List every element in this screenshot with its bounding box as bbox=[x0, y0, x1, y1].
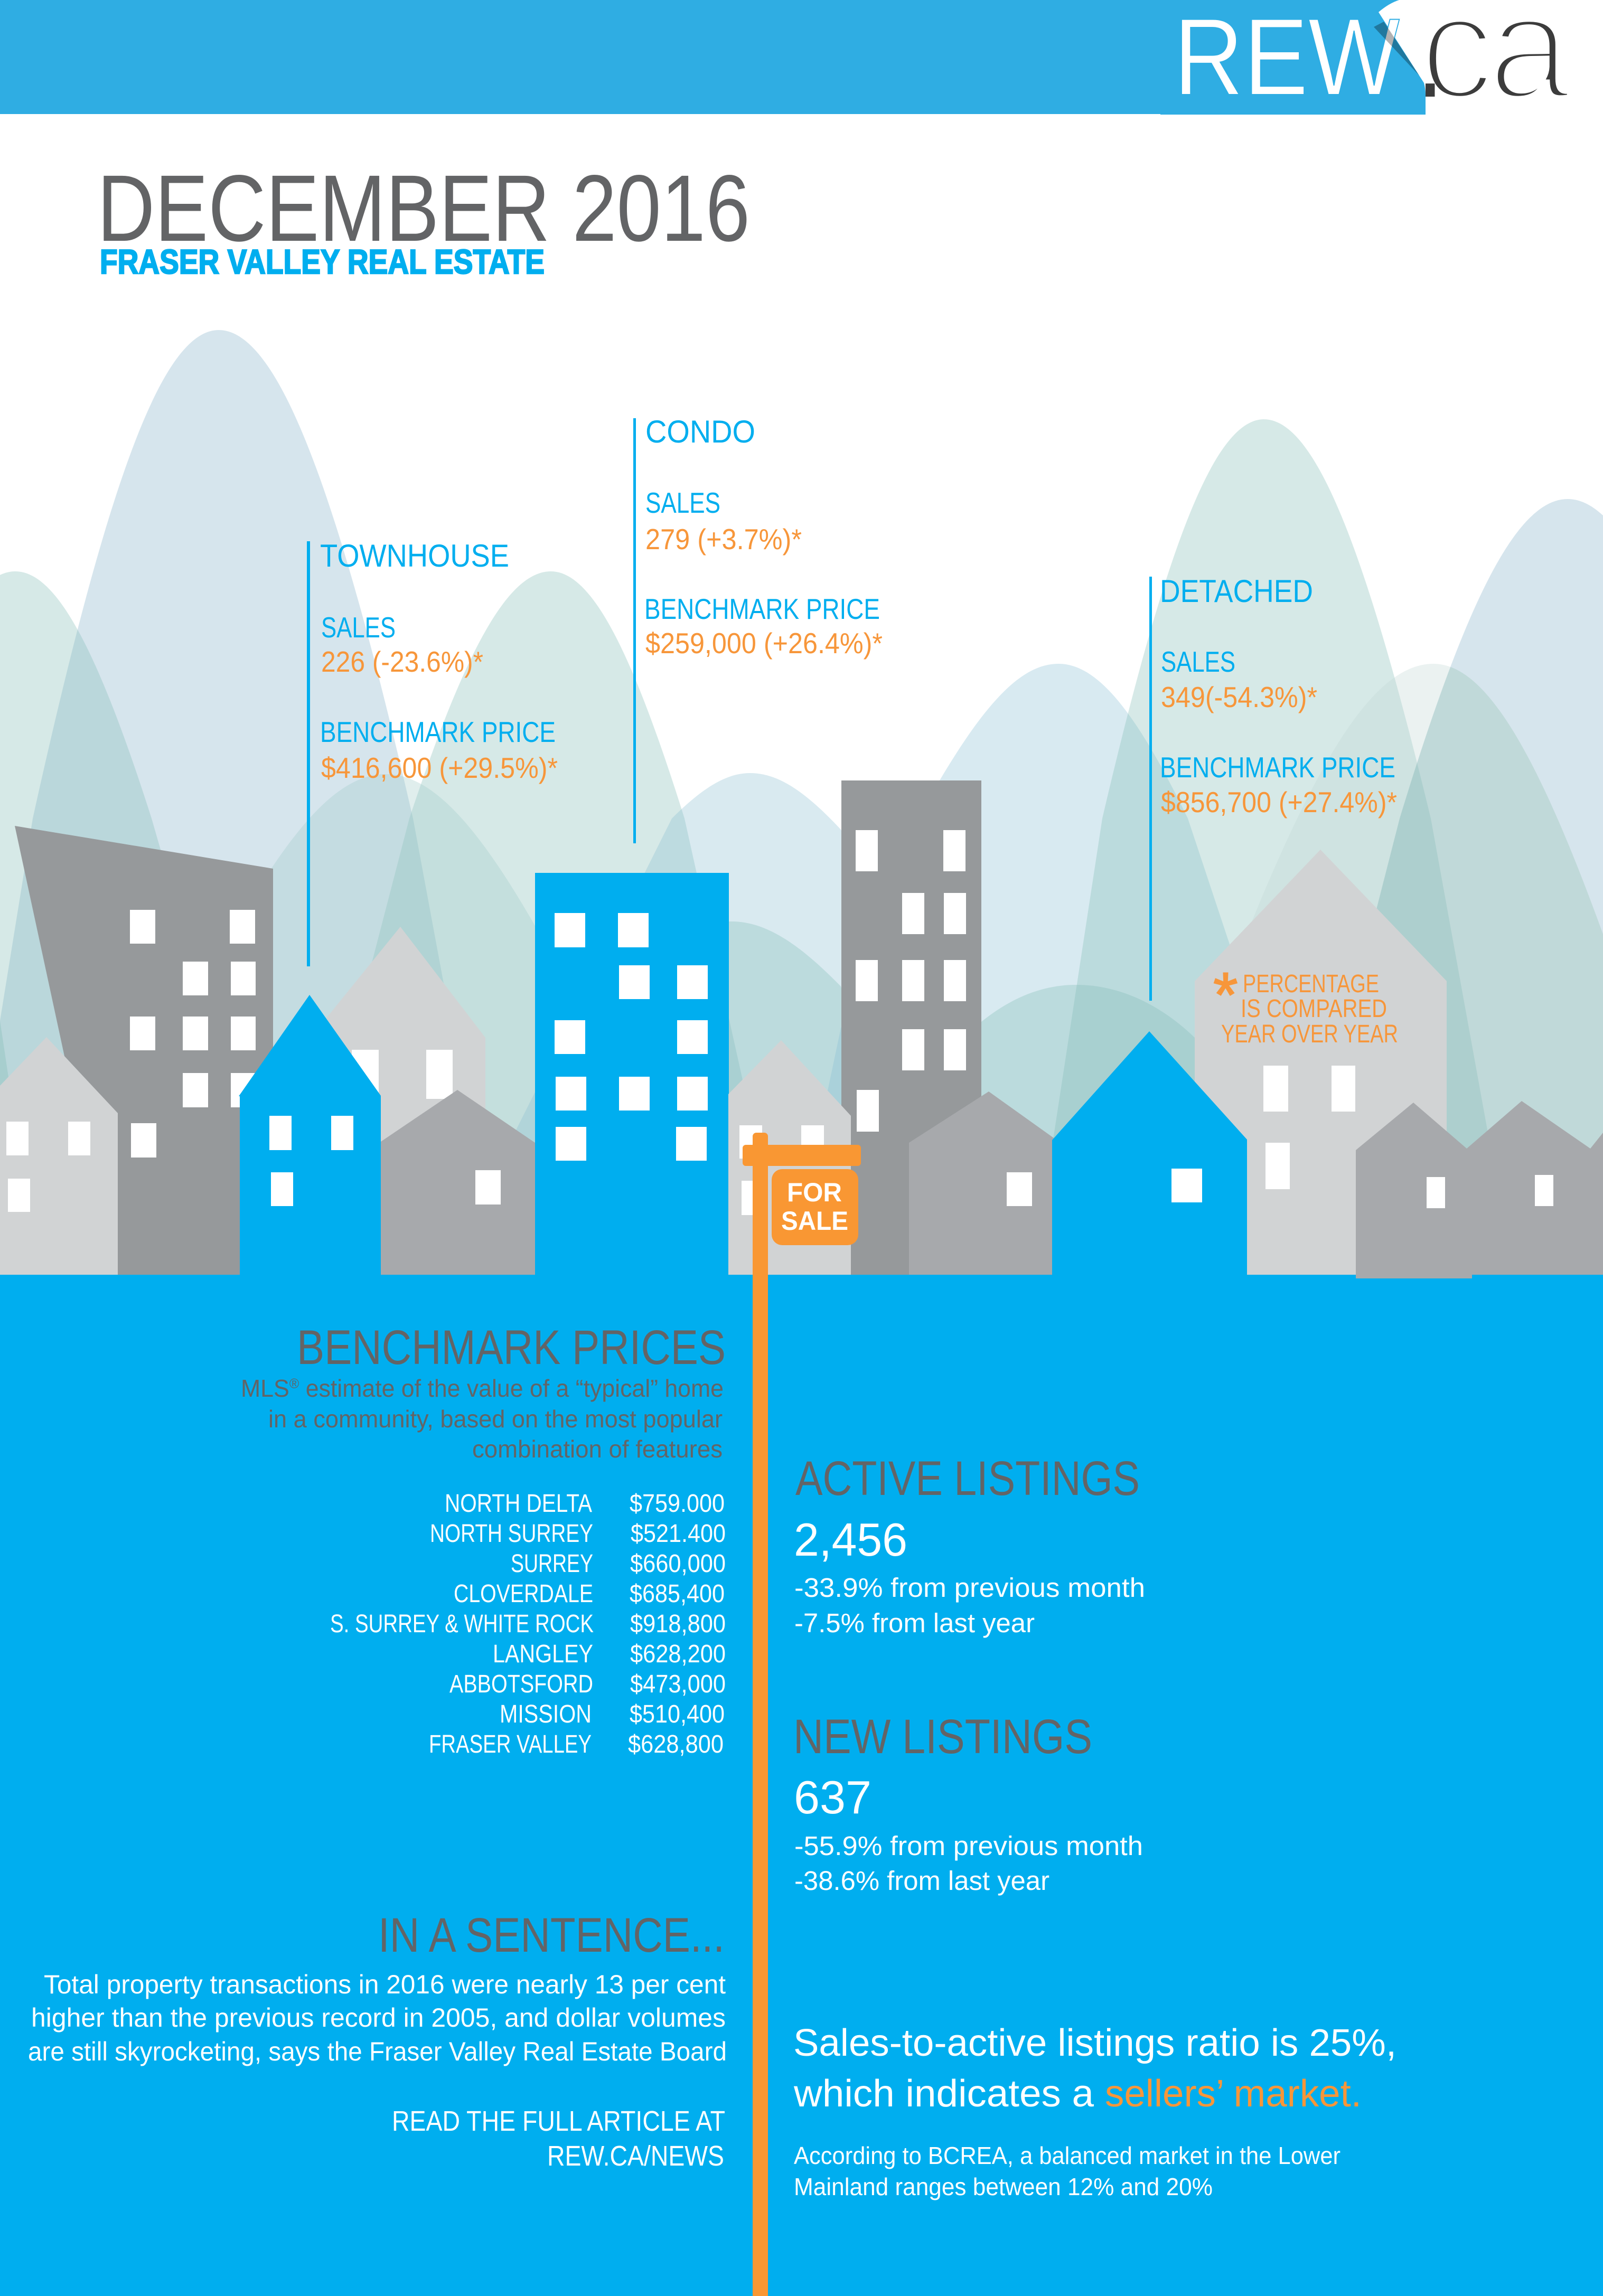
panel: in a sentence: Total property transactions in 2016 were nearly 13 per cent bbox=[44, 1970, 726, 1999]
panel: condo stats: CONDO bbox=[645, 414, 755, 449]
house: blue left bbox=[239, 995, 381, 1275]
panel: sales-to-active ratio: sellers’ market. bbox=[1105, 2073, 1362, 2115]
panel: new listings: NEW LISTINGS bbox=[793, 1710, 1092, 1764]
panel: condo stats: SALES bbox=[645, 486, 720, 519]
panel: townhouse stats: $416,600 (+29.5%)* bbox=[321, 751, 558, 784]
description: ® bbox=[289, 1376, 299, 1391]
panel: active listings: ACTIVE LISTINGS bbox=[795, 1452, 1140, 1505]
table: community prices: $628,800 bbox=[628, 1730, 724, 1758]
panel: condo stats: BENCHMARK PRICE bbox=[644, 592, 880, 625]
table: community prices: NORTH DELTA bbox=[445, 1490, 592, 1518]
panel: active listings: -7.5% from last year bbox=[794, 1608, 1035, 1638]
panel: condo stats: 279 (+3.7%)* bbox=[645, 523, 802, 556]
panel: sales-to-active ratio: Sales-to-active listings ratio is 25%, bbox=[793, 2022, 1396, 2064]
table: community prices: S. SURREY & WHITE ROCK bbox=[330, 1610, 594, 1638]
icon: for sale sign: FOR bbox=[787, 1178, 842, 1207]
panel: detached stats: BENCHMARK PRICE bbox=[1160, 751, 1395, 784]
callout: percentage note: * bbox=[1213, 959, 1238, 1030]
panel: in a sentence: READ THE FULL ARTICLE AT bbox=[392, 2105, 725, 2137]
panel: sales-to-active ratio: which indicates a bbox=[793, 2073, 1094, 2115]
callout: percentage note: YEAR OVER YEAR bbox=[1221, 1020, 1398, 1048]
panel: active listings: 2,456 bbox=[794, 1513, 907, 1566]
table: community prices: $759.000 bbox=[630, 1490, 725, 1518]
panel: active listings bbox=[794, 1452, 1145, 1638]
panel: townhouse stats: TOWNHOUSE bbox=[320, 538, 509, 573]
blue banner bbox=[0, 0, 1426, 115]
panel: in a sentence bbox=[28, 1908, 727, 2172]
skyline of buildings bbox=[0, 780, 1603, 1278]
table: community prices: FRASER VALLEY bbox=[429, 1730, 592, 1758]
table: community prices: CLOVERDALE bbox=[454, 1580, 593, 1608]
panel: detached stats bbox=[1149, 573, 1397, 1001]
table: community prices: $685,400 bbox=[630, 1580, 725, 1608]
panel: townhouse stats: 226 (-23.6%)* bbox=[321, 645, 483, 678]
panel: benchmark prices bbox=[241, 1321, 726, 1758]
table: community prices: LANGLEY bbox=[493, 1640, 593, 1668]
heading: BENCHMARK PRICES bbox=[297, 1321, 726, 1375]
callout: percentage note: IS COMPARED bbox=[1241, 995, 1387, 1023]
table: community prices: ABBOTSFORD bbox=[449, 1670, 593, 1698]
panel: townhouse stats: SALES bbox=[321, 611, 396, 644]
panel: detached stats: SALES bbox=[1161, 645, 1235, 678]
building: blue tower bbox=[535, 873, 729, 1275]
panel: detached stats: $856,700 (+27.4%)* bbox=[1161, 786, 1397, 818]
description bbox=[241, 1375, 724, 1463]
title: DECEMBER 2016 bbox=[97, 155, 750, 261]
house: small light gray centre bbox=[728, 1040, 851, 1275]
panel: detached stats: 349(-54.3%)* bbox=[1161, 681, 1317, 713]
house: gray centre right bbox=[909, 1091, 1054, 1275]
header banner with REW.ca logo bbox=[0, 0, 1567, 115]
description: MLS bbox=[241, 1375, 291, 1402]
icon: for sale sign: SALE bbox=[781, 1206, 848, 1236]
house: light gray far left bbox=[0, 1037, 118, 1275]
description: in a community, based on the most popular bbox=[268, 1405, 723, 1433]
panel: condo stats bbox=[633, 414, 883, 843]
building: gray angled tower bbox=[15, 826, 273, 1275]
table: community prices: SURREY bbox=[511, 1550, 593, 1578]
callout: percentage note bbox=[1213, 959, 1398, 1048]
panel: blue lower background bbox=[0, 1275, 1603, 2296]
panel: new listings bbox=[793, 1710, 1143, 1896]
panel: condo stats: $259,000 (+26.4%)* bbox=[645, 627, 883, 660]
panel: townhouse stats bbox=[307, 538, 558, 966]
description: estimate of the value of a “typical” home bbox=[299, 1375, 724, 1402]
house: gray right pair bbox=[1356, 1101, 1603, 1278]
house: large light gray with note bbox=[1195, 850, 1447, 1275]
panel: in a sentence: higher than the previous record in 2005, and dollar volumes bbox=[31, 2003, 726, 2032]
panel: new listings: 637 bbox=[794, 1771, 871, 1823]
table: community prices: NORTH SURREY bbox=[430, 1520, 593, 1548]
panel: detached stats: DETACHED bbox=[1160, 573, 1313, 609]
panel: sales-to-active ratio: Mainland ranges between 12% and 20% bbox=[794, 2173, 1213, 2200]
panel: new listings: -55.9% from previous month bbox=[794, 1831, 1143, 1861]
panel: in a sentence: REW.CA/NEWS bbox=[547, 2140, 724, 2172]
logo: REW.ca bbox=[1182, 19, 1567, 97]
callout: percentage note: PERCENTAGE bbox=[1243, 970, 1379, 998]
table: community prices: $628,200 bbox=[630, 1640, 726, 1668]
panel: in a sentence: IN A SENTENCE... bbox=[378, 1908, 725, 1962]
subtitle: FRASER VALLEY REAL ESTATE bbox=[100, 242, 545, 281]
panel: sales-to-active ratio bbox=[793, 2022, 1396, 2200]
icon: for sale sign bbox=[743, 1133, 861, 2296]
house: mid gray bbox=[381, 1090, 535, 1275]
table: community prices: $660,000 bbox=[630, 1550, 726, 1578]
panel: in a sentence: are still skyrocketing, says the Fraser Valley Real Estate Board bbox=[28, 2037, 727, 2066]
mountain backdrop bbox=[0, 330, 1603, 1149]
table: community prices bbox=[330, 1490, 726, 1758]
panel: new listings: -38.6% from last year bbox=[794, 1866, 1049, 1896]
table: community prices: $521.400 bbox=[631, 1520, 726, 1548]
house: light gray behind bbox=[317, 927, 485, 1275]
table: community prices: $473,000 bbox=[630, 1670, 726, 1698]
panel: sales-to-active ratio: According to BCREA, a balanced market in the Lower bbox=[794, 2142, 1340, 2169]
table: community prices: $918,800 bbox=[630, 1610, 726, 1638]
panel: active listings: -33.9% from previous month bbox=[794, 1573, 1145, 1603]
table: community prices: MISSION bbox=[500, 1700, 592, 1728]
building: gray tower centre bbox=[841, 780, 981, 1275]
table: community prices: $510,400 bbox=[630, 1700, 725, 1728]
panel: townhouse stats: BENCHMARK PRICE bbox=[320, 716, 556, 748]
description: combination of features bbox=[472, 1435, 723, 1463]
house: blue right bbox=[1052, 1031, 1247, 1275]
